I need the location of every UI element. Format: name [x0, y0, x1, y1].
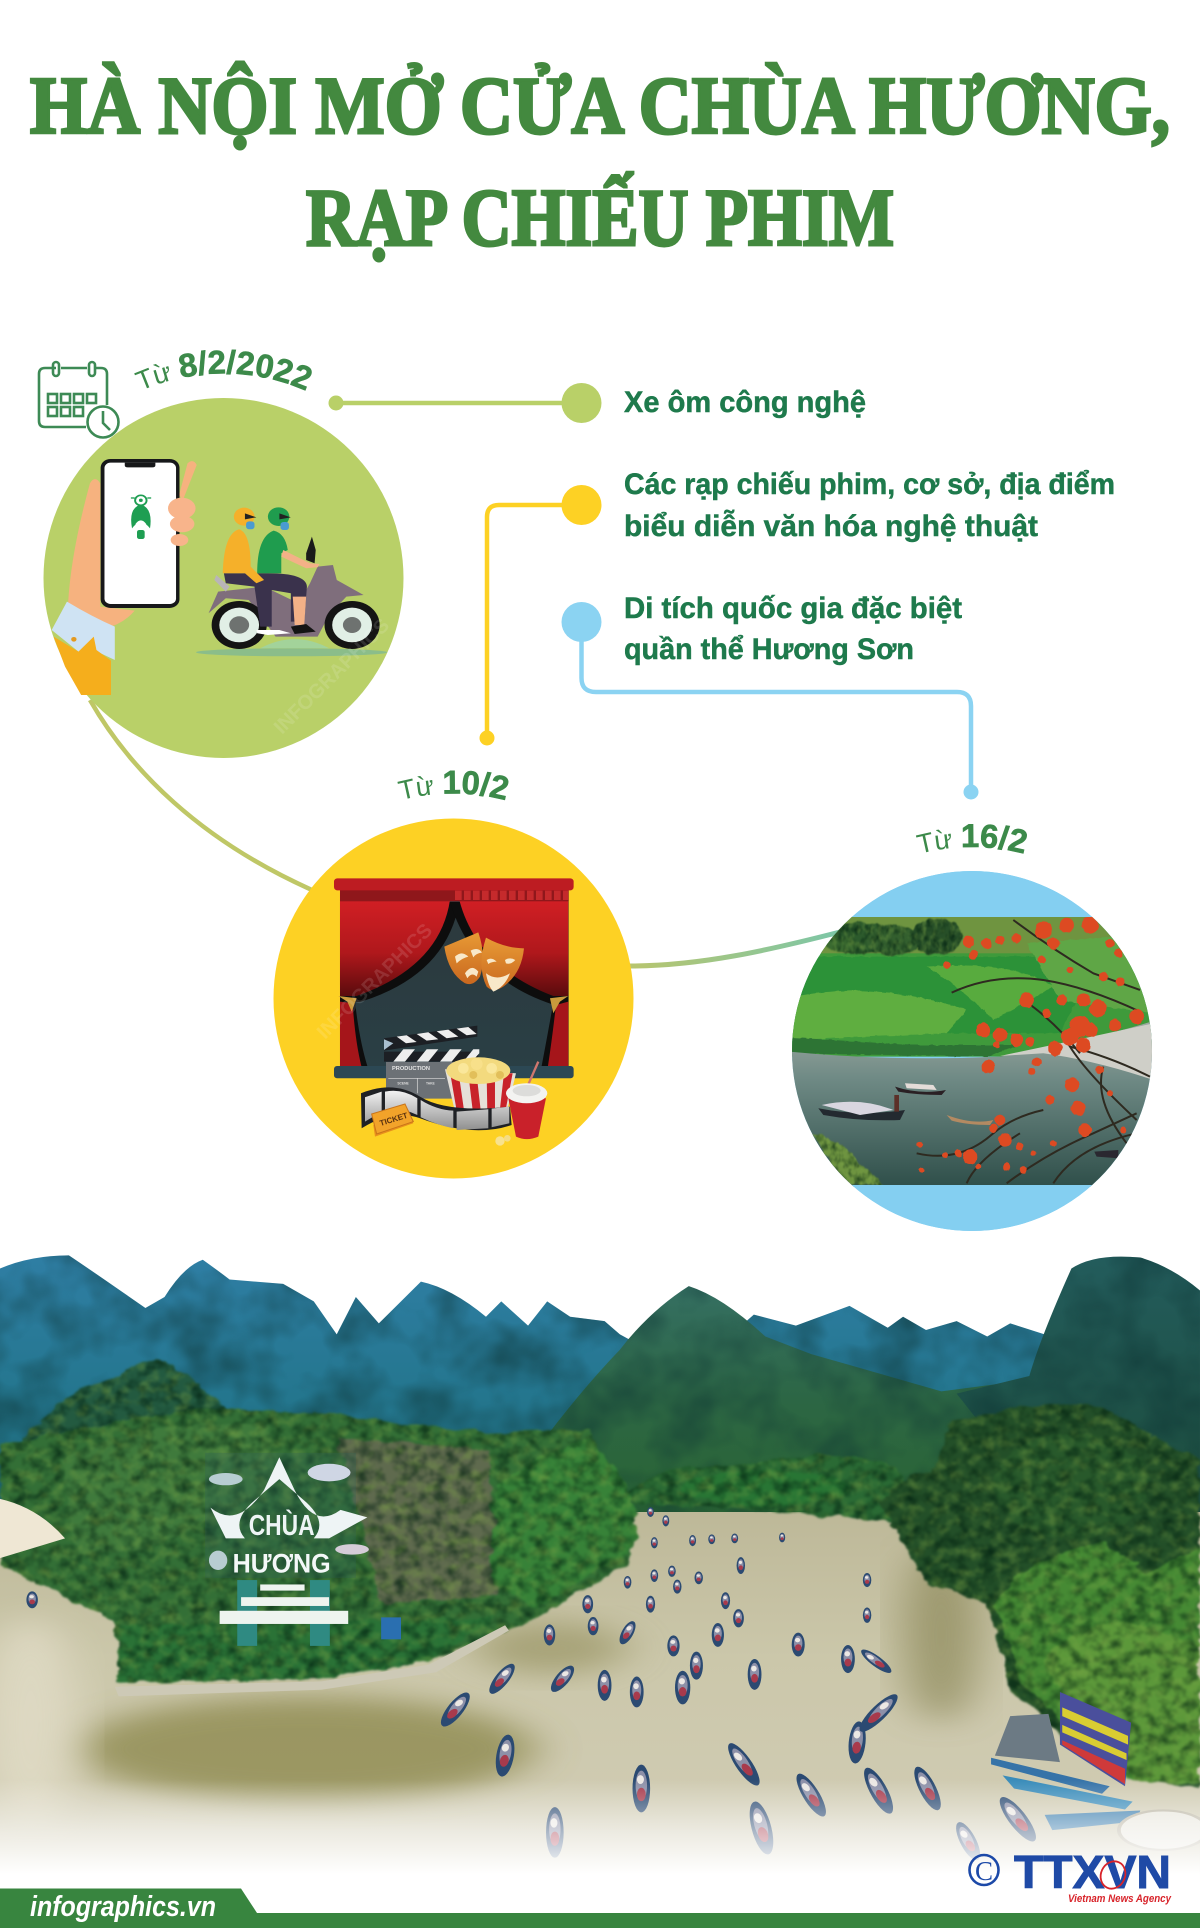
item: cinemas	[480, 468, 1115, 746]
bottom fade to white	[0, 1780, 1200, 1874]
water	[0, 1512, 1200, 1876]
footer band and tab	[0, 1888, 1200, 1928]
river	[790, 1020, 1157, 1187]
icon: tickets	[372, 1104, 413, 1137]
field	[790, 917, 1153, 1057]
site name: infographics.vn	[30, 1891, 216, 1923]
copyright mark	[970, 1855, 998, 1886]
item: heritage site: Di tích quốc gia đặc biệt	[624, 592, 962, 625]
low foliage	[813, 1133, 883, 1185]
agency name: Vietnam News Agency	[1068, 1893, 1172, 1905]
icon: clapperboard	[384, 1026, 479, 1099]
item: heritage site	[562, 592, 978, 800]
icon: hand holding phone	[52, 459, 197, 695]
icon: clapperboard: SCENE	[397, 1082, 410, 1086]
top and bottom sky bands	[852, 871, 1092, 1231]
panel: ride-hailing from 8/2/2022	[38, 350, 404, 758]
illustration: stage, masks, cinema items	[334, 878, 574, 1146]
Chua Huong sign: CHÙA	[249, 1509, 315, 1541]
icon: tickets: TICKET	[379, 1111, 409, 1128]
right forest	[880, 1405, 1200, 1788]
title	[30, 60, 1170, 263]
bullet list with connectors	[328, 383, 1115, 800]
globe swoosh	[1096, 1857, 1130, 1893]
Chua Huong sign	[205, 1453, 401, 1646]
back mountains	[0, 1255, 1045, 1538]
footer	[0, 1888, 1200, 1928]
island stone edge	[115, 1625, 509, 1696]
sand patch	[0, 1499, 65, 1558]
icon: drama masks	[444, 932, 524, 992]
yellow circle	[274, 818, 634, 1178]
far tree line	[620, 1455, 934, 1525]
green circle	[44, 398, 404, 758]
item: cinemas: Các rạp chiếu phim, cơ sở, địa điểm	[624, 468, 1115, 501]
panel: cinemas from 10/2	[274, 770, 634, 1178]
left forest and island	[0, 1409, 636, 1683]
TTXVN logo	[970, 1846, 1172, 1905]
watermark: INFOGRAPHICS	[270, 615, 394, 739]
left foreground mound	[23, 1358, 253, 1446]
boats	[818, 1083, 1118, 1158]
red flowers	[917, 916, 1144, 1173]
watermark: INFOGRAPHICS	[313, 920, 437, 1044]
icon: popcorn	[445, 1057, 516, 1112]
title: RẠP CHIẾU PHIM	[306, 171, 894, 263]
icon: drink cup	[495, 1062, 547, 1146]
central green mountain	[536, 1286, 1071, 1538]
boats on the river	[26, 1507, 1043, 1861]
branches	[917, 920, 1150, 1183]
icon: calendar with clock	[39, 362, 118, 438]
panorama: Huong pagoda river landscape	[0, 1255, 1200, 1928]
distant trees	[827, 918, 962, 955]
date label	[916, 824, 1027, 854]
illustration: hand and phone, motorbike	[52, 459, 387, 695]
icon: film strip	[361, 1087, 512, 1130]
icon: theatre curtain	[334, 878, 574, 1078]
panel: Huong Son from 16/2	[792, 824, 1152, 1231]
connector: circle one to circle two	[90, 700, 312, 890]
item: ride hailing: Xe ôm công nghệ	[624, 386, 866, 419]
riverside dock and banner	[991, 1692, 1200, 1850]
blue circle	[792, 871, 1152, 1231]
right dark mountain	[957, 1257, 1200, 1538]
connector: circle two to circle three	[630, 932, 840, 966]
date label	[398, 770, 508, 800]
item: cinemas: biểu diễn văn hóa nghệ thuật	[624, 509, 1038, 543]
item: ride hailing	[328, 383, 866, 423]
icon: two riders on motorbike	[196, 507, 387, 656]
icon: clapperboard: PRODUCTION	[392, 1066, 430, 1072]
date label: Từ 16/2	[916, 824, 1027, 854]
icon: scooter logo	[131, 495, 151, 539]
item: heritage site: quần thể Hương Sơn	[624, 633, 914, 666]
icon: clapperboard: TAKE	[426, 1082, 436, 1086]
agency wordmark: TTXVN	[1014, 1846, 1171, 1898]
Chua Huong sign: HƯƠNG	[233, 1549, 331, 1579]
riverbank strip	[790, 1037, 1020, 1057]
date label: Từ 10/2	[398, 770, 508, 800]
date label: Từ 8/2/2022	[134, 350, 312, 391]
copyright mark: C	[975, 1856, 993, 1886]
illustration: river landscape with silk cotton tree	[790, 916, 1157, 1187]
